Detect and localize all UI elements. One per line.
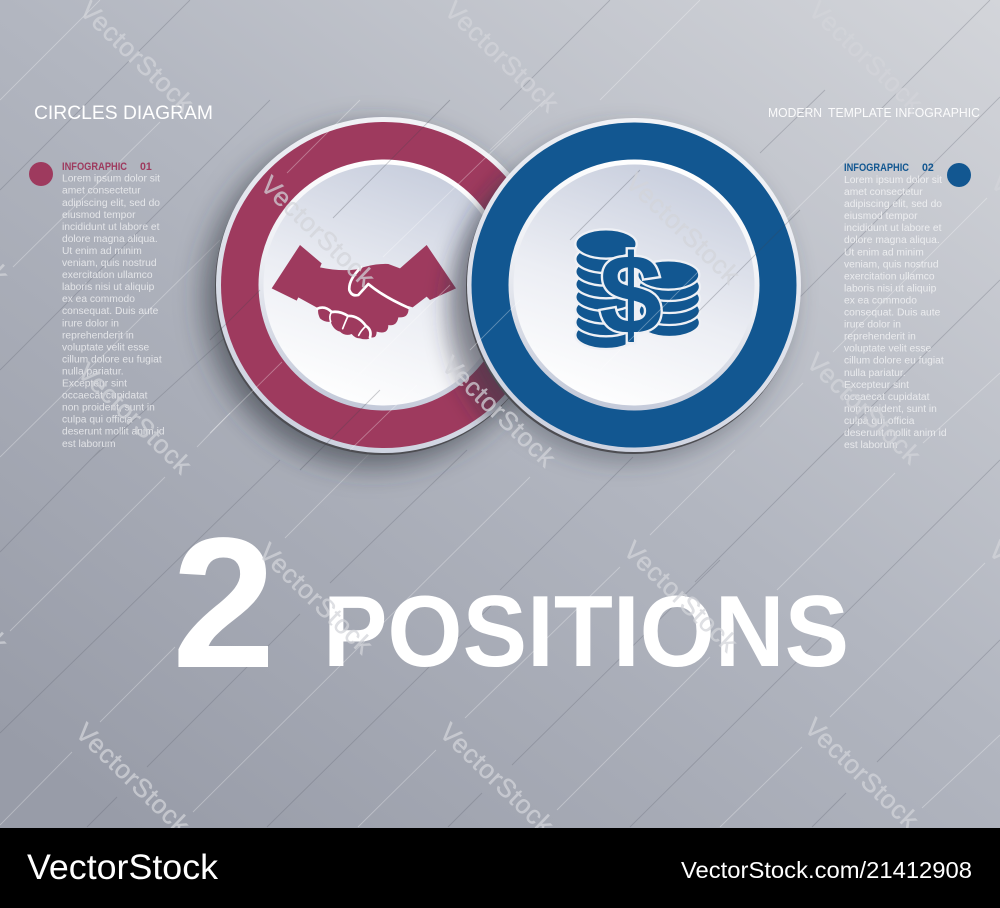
watermarks: VectorStock [799,712,925,835]
watermarks: VectorStock [801,347,927,470]
big number 2: 2 [172,500,275,707]
watermarks: VectorStock [620,167,746,290]
text block: infographic 02 [844,162,971,451]
body text 02: ex ea commodo [844,296,917,306]
body text 01: cillum dolore eu fugiat [62,354,162,365]
heading: modern template infographic: TEMPLATE INFOGRAPHIC [828,105,980,120]
body text 01: amet consectetur [62,186,141,197]
body text 01: Excepteur sint [62,378,127,390]
label 02: INFOGRAPHIC [844,162,909,174]
marker dot 02 [947,163,971,187]
circle: red handshake [204,117,552,467]
body text 02: irure dolor in [844,320,901,331]
body text 02: consequat. Duis aute [844,308,941,318]
icon: coins and dollar [575,229,700,359]
body text 01: ex ea commodo [62,294,135,305]
label 01: INFOGRAPHIC [62,161,127,173]
body text 02: eiusmod tempor [844,211,918,222]
label 02: 02 [922,162,934,174]
body text 01: reprehenderit in [62,330,134,341]
heading: modern template infographic: MODERN [768,105,822,120]
body text 01: nulla pariatur. [62,366,124,378]
body text 02: culpa qui officia [844,416,915,427]
body text 01: irure dolor in [62,318,119,329]
marker dot 01 [29,162,53,186]
body text 01: eiusmod tempor [62,210,136,221]
body text 02: voluptate velit esse [844,344,931,355]
body text 02: nulla pariatur. [844,368,906,379]
body text 01: consequat. Duis aute [62,306,159,317]
body text 01: exercitation ullamco [62,270,153,281]
body text 02: laboris nisi ut aliquip [844,283,937,294]
watermarks: VectorStock [70,717,196,840]
body text 02: Excepteur sint [844,380,909,391]
body text 02: incididunt ut labore et [844,223,942,234]
body text 01: voluptate velit esse [62,342,149,353]
body text 02: reprehenderit in [844,332,916,343]
heading: circles diagram: CIRCLES DIAGRAM [34,102,213,124]
body text 02: dolore magna aliqua. [844,235,940,246]
body text 02: cillum dolore eu fugiat [844,356,944,367]
icon: handshake [272,245,456,339]
icon: coins and dollar: $ [599,232,662,359]
faint lines over the circles [210,100,800,470]
text block: infographic 01 [29,161,167,450]
body text 01: laboris nisi ut aliquip [62,282,155,293]
body text 01: Lorem ipsum dolor sit [62,174,160,185]
body text 01: veniam, quis nostrud [62,258,157,269]
footer url text: VectorStock.com/21412908 [681,857,972,883]
shadow: blue circle cast on red circle [432,168,510,427]
body text 02: occaecat cupidatat [844,392,930,403]
body text 02: exercitation ullamco [844,271,935,282]
body text 02: amet consectetur [844,187,923,198]
body text 01: incididunt ut labore et [62,222,160,233]
watermarks: VectorStock [253,537,379,660]
body text 01: non proident, sunt in [62,403,155,414]
body text 01: Ut enim ad minim [62,246,142,257]
body text 01: dolore magna aliqua. [62,234,158,245]
body text 01: occaecat cupidatat [62,391,148,402]
body text 02: est laborum [844,440,898,451]
watermarks: VectorStock [434,717,560,840]
body text 01: culpa qui officia [62,415,133,426]
watermarks: VectorStock [436,350,562,473]
circle: blue coins [459,118,801,463]
watermarks: VectorStock [618,535,744,658]
body text 02: Lorem ipsum dolor sit [844,175,942,186]
watermarks: VectorStock [72,357,198,480]
body text 02: deserunt mollit anim id [844,428,947,439]
body text 01: est laborum [62,439,116,450]
watermarks: VectorStock [255,170,381,293]
big word positions: POSITIONS [323,576,849,688]
body text 02: non proident, sunt in [844,404,937,415]
footer logo text: VectorStock [27,848,219,887]
body text 02: veniam, quis nostrud [844,259,939,270]
body text 02: adipiscing elit, sed do [844,199,942,210]
footer bar [0,828,1000,908]
label 01: 01 [140,161,152,173]
body text 01: adipiscing elit, sed do [62,198,160,209]
body text 01: deserunt mollit anim id [62,427,165,438]
body text 02: Ut enim ad minim [844,247,924,258]
